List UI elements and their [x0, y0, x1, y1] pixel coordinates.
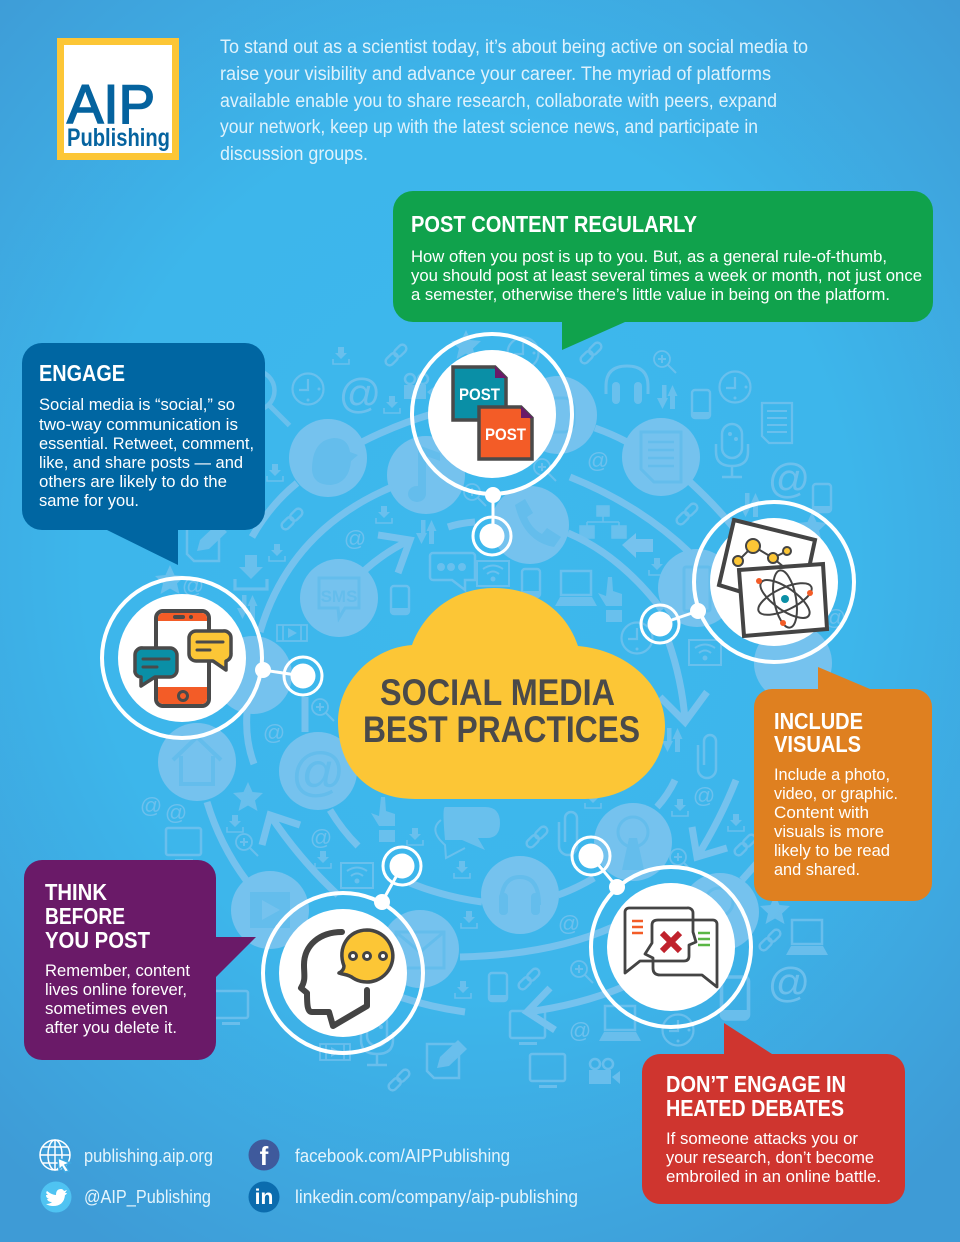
panel: include visuals: [754, 667, 932, 901]
icon: facebook: [248, 1140, 280, 1171]
intro text: raise your visibility and advance your career. The myriad of platforms: [220, 64, 771, 85]
icon: facebook: f: [260, 1141, 269, 1171]
panel: don't engage in heated debates: [642, 1023, 905, 1204]
panel: engage: others are likely to do the: [39, 472, 227, 491]
panel: engage: ENGAGE: [39, 360, 125, 386]
panel: think before you post: [24, 860, 256, 1060]
panel: post content regularly: you should post at least several times a week or month, not just once: [411, 266, 922, 285]
intro text: To stand out as a scientist today, it’s about being active on social media to: [220, 37, 808, 58]
background pattern: connected social icons: [140, 330, 846, 1092]
background pattern: connected social icons: @: [768, 959, 810, 1006]
panel: think before you post: sometimes even: [45, 999, 168, 1018]
panel: post content regularly: How often you post is up to you. But, as a general rule-of-thumb,: [411, 247, 887, 266]
icon: linkedin: in: [255, 1186, 273, 1209]
panel: post content regularly: POST CONTENT REGULARLY: [411, 211, 697, 237]
logo: AIP Publishing: Publishing: [67, 124, 170, 152]
background pattern: connected social icons: @: [824, 605, 846, 630]
link: linkedin page: linkedin.com/company/aip-publishing: [295, 1187, 578, 1207]
icon: twitter: [40, 1182, 72, 1212]
intro text: available enable you to share research, collaborate with peers, expand: [220, 91, 777, 112]
panel: include visuals: INCLUDE: [774, 708, 863, 734]
background pattern: connected social icons: @: [182, 573, 204, 598]
panel: include visuals: visuals is more: [774, 822, 884, 841]
panel: include visuals: Content with: [774, 803, 869, 822]
background pattern: connected social icons: @: [558, 911, 580, 936]
background pattern: connected social icons: SMS: [321, 587, 357, 606]
panel: think before you post: THINK: [45, 879, 107, 905]
logo: AIP Publishing: AIP: [67, 73, 155, 135]
panel: central cloud title: [338, 588, 665, 799]
link: facebook page: facebook.com/AIPPublishing: [295, 1146, 510, 1166]
background pattern: connected social icons: @: [569, 1018, 591, 1043]
panel: think before you post: YOU POST: [45, 927, 150, 953]
icon: globe with cursor: [40, 1140, 70, 1172]
background pattern: connected social icons: @: [344, 526, 366, 551]
icon node: phone with chat bubbles: [102, 578, 322, 738]
panel: engage: [22, 343, 265, 565]
icon node: post documents: [412, 334, 572, 555]
background pattern: connected social icons: @: [263, 720, 285, 745]
panel: engage: same for you.: [39, 491, 139, 510]
panel: don't engage in heated debates: your research, don’t become: [666, 1148, 874, 1167]
footer: contact links: [40, 1140, 578, 1212]
heading: social media best practices: SOCIAL MEDIA: [380, 672, 615, 713]
intro text: your network, keep up with the latest science news, and participate in: [220, 117, 758, 138]
panel: post content regularly: a semester, otherwise there’s little value in being on the platform.: [411, 285, 890, 304]
panel: think before you post: BEFORE: [45, 903, 125, 929]
logo: AIP Publishing: [57, 38, 179, 160]
heading: social media best practices: [363, 672, 640, 750]
panel: think before you post: lives online forever,: [45, 980, 187, 999]
background pattern: connected social icons: @: [693, 783, 715, 808]
background pattern: connected social icons: @: [768, 455, 810, 502]
background pattern: connected social icons: @: [291, 742, 345, 802]
background pattern: connected social icons: @: [140, 793, 162, 818]
background pattern: connected social icons: @: [310, 825, 332, 850]
panel: think before you post: Remember, content: [45, 961, 190, 980]
panel: don't engage in heated debates: If someone attacks you or: [666, 1129, 858, 1148]
panel: include visuals: VISUALS: [774, 731, 861, 757]
panel: engage: two-way communication is: [39, 415, 238, 434]
intro text: discussion groups.: [220, 144, 368, 165]
icon node: heated debate: [572, 837, 751, 1027]
panel: include visuals: Include a photo,: [774, 765, 890, 784]
panel: engage: like, and share posts — and: [39, 453, 243, 472]
panel: include visuals: and shared.: [774, 860, 860, 879]
panel: include visuals: likely to be read: [774, 841, 890, 860]
icon node: post documents: POST: [459, 385, 501, 404]
icon: linkedin: [248, 1182, 280, 1212]
panel: think before you post: after you delete it.: [45, 1018, 177, 1037]
panel: include visuals: video, or graphic.: [774, 784, 898, 803]
icon node: post documents: POST: [485, 425, 527, 444]
intro text: [220, 37, 808, 165]
heading: social media best practices: BEST PRACTICES: [363, 709, 640, 750]
background pattern: connected social icons: @: [339, 370, 381, 417]
panel: don't engage in heated debates: DON’T ENGAGE IN: [666, 1071, 846, 1097]
panel: engage: Social media is “social,” so: [39, 395, 235, 414]
panel: don't engage in heated debates: HEATED DEBATES: [666, 1095, 844, 1121]
background pattern: connected social icons: @: [587, 448, 609, 473]
icon node: head thinking: [263, 847, 423, 1053]
panel: engage: essential. Retweet, comment,: [39, 434, 254, 453]
icon node: visuals photos: [641, 502, 854, 662]
background pattern: connected social icons: @: [165, 800, 187, 825]
link: publishing.aip.org: publishing.aip.org: [84, 1146, 213, 1166]
panel: don't engage in heated debates: embroiled in an online battle.: [666, 1167, 881, 1186]
link: twitter handle: @AIP_Publishing: [84, 1187, 211, 1208]
panel: post content regularly: [393, 191, 933, 350]
cloud shape: [338, 588, 665, 799]
